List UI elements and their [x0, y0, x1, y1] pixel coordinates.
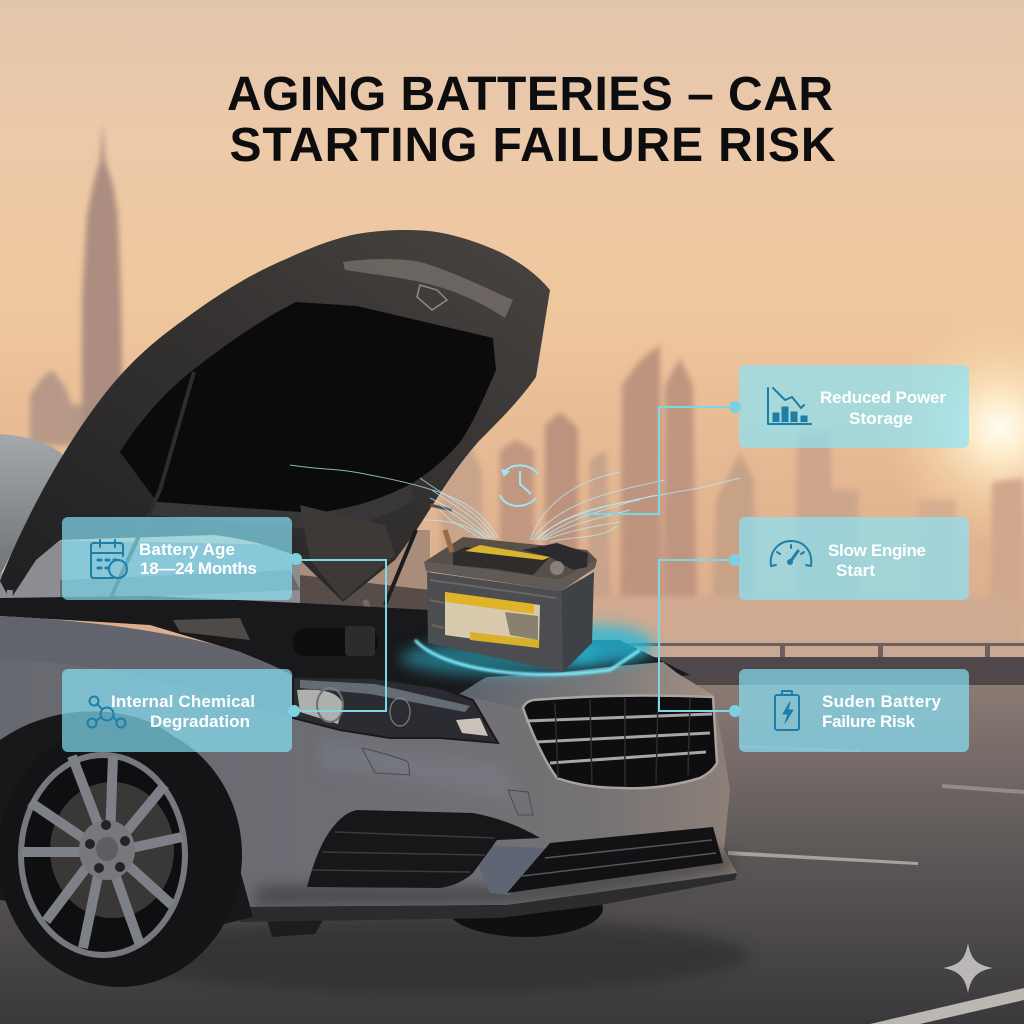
panel: sudden battery failure risk [729, 669, 969, 752]
panel: slow engine start: Start [836, 561, 875, 580]
city skyline [30, 122, 1024, 620]
engine bay [0, 596, 690, 698]
panel: internal chemical degradation: Internal Chemical [111, 692, 255, 711]
connector: slow engine and battery failure [659, 560, 735, 711]
energy wires [290, 465, 740, 542]
title: STARTING FAILURE RISK [230, 119, 836, 172]
panel: reduced power storage: Reduced Power [820, 388, 946, 407]
road barrier [620, 640, 1024, 686]
panel: battery age [62, 517, 302, 600]
title [227, 68, 836, 172]
icon: molecule [88, 696, 126, 728]
icon: sparkle watermark [943, 943, 993, 993]
background: sunset sky [0, 0, 1024, 690]
road surface [0, 685, 1024, 1024]
icon: battery with lightning bolt [775, 691, 799, 730]
headlight [293, 677, 498, 743]
panel: battery age: 18—24 Months [140, 559, 257, 578]
panel: internal chemical degradation: Degradation [150, 712, 250, 731]
car battery [424, 505, 597, 672]
icon: calendar [91, 540, 127, 578]
panel: sudden battery failure risk: Failure Risk [822, 712, 916, 731]
panel: internal chemical degradation [62, 669, 300, 752]
connector: left panels [294, 560, 386, 711]
icon: clock [500, 465, 538, 506]
panel: reduced power storage: Storage [849, 409, 913, 428]
horizon haze [430, 596, 1024, 644]
lower bumper vents [307, 810, 723, 893]
icon: declining chart [768, 388, 811, 424]
icon: speedometer [771, 541, 811, 566]
rear wheel [0, 711, 253, 987]
sun glow [880, 308, 1024, 548]
battery glow [400, 625, 655, 676]
front wheel [267, 879, 603, 937]
panel: slow engine start: Slow Engine [828, 541, 926, 560]
open car hood [0, 230, 550, 640]
panel: reduced power storage [729, 365, 969, 448]
panel: battery age: Battery Age [139, 540, 235, 559]
connector: reduced power storage [585, 407, 735, 514]
title: AGING BATTERIES – CAR [227, 68, 833, 121]
grille [523, 696, 717, 788]
car body [0, 616, 737, 922]
car windshield and cabin [0, 434, 430, 615]
panel: sudden battery failure risk: Suden Battery [822, 692, 942, 711]
panel: slow engine start [729, 517, 969, 600]
